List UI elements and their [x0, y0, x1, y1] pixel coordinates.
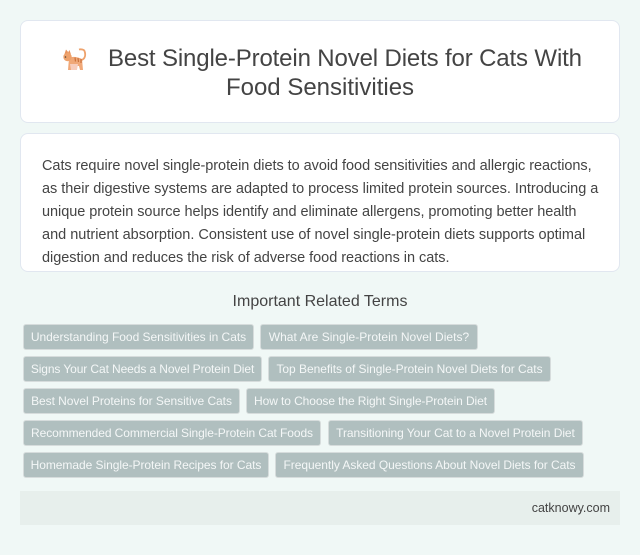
- icon: cat: [63, 48, 86, 70]
- chip: Frequently Asked Questions About Novel Diets for Cats: [283, 458, 576, 472]
- chip: Understanding Food Sensitivities in Cats: [31, 330, 246, 344]
- description panel: [20, 133, 620, 272]
- chip: Recommended Commercial Single-Protein Cat Foods: [31, 426, 313, 440]
- description panel: digestion and reduces the risk of adverse food reactions in cats.: [42, 250, 450, 266]
- title panel: [20, 20, 620, 123]
- chip: Top Benefits of Single-Protein Novel Diets for Cats: [276, 362, 543, 376]
- chip: [275, 452, 584, 478]
- description text: as their digestive systems are adapted to process limited protein sources. Introducing a: [42, 181, 598, 197]
- chip: [260, 324, 478, 350]
- chip: Homemade Single-Protein Recipes for Cats: [31, 458, 261, 472]
- chip: [23, 452, 269, 478]
- term chips: [23, 324, 584, 478]
- chip: [246, 388, 495, 414]
- source label: catknowy.com: [532, 501, 610, 515]
- description text: unique protein source helps identify and eliminate allergens, promoting better health: [42, 204, 576, 220]
- chip: Best Novel Proteins for Sensitive Cats: [31, 394, 232, 408]
- chip: [268, 356, 551, 382]
- chip: [23, 324, 254, 350]
- chip: [23, 420, 321, 446]
- title: Best Single-Protein Novel Diets for Cats With: [108, 45, 582, 72]
- related terms heading: Important Related Terms: [233, 293, 407, 310]
- chip: What Are Single-Protein Novel Diets?: [269, 330, 469, 344]
- footer bar: [20, 491, 620, 525]
- chip: Signs Your Cat Needs a Novel Protein Diet: [31, 362, 254, 376]
- title: [108, 45, 582, 101]
- description text: Cats require novel single-protein diets to avoid food sensitivities and allergic reactions,: [42, 158, 592, 174]
- chip: How to Choose the Right Single-Protein Diet: [254, 394, 487, 408]
- title: Food Sensitivities: [226, 74, 414, 101]
- chip: [23, 356, 262, 382]
- description text: [42, 158, 598, 266]
- chip: [23, 388, 240, 414]
- chip: [328, 420, 583, 446]
- chip: Transitioning Your Cat to a Novel Protein Diet: [336, 426, 575, 440]
- description text: and nutrient absorption. Consistent use of novel single-protein diets supports optimal: [42, 227, 585, 243]
